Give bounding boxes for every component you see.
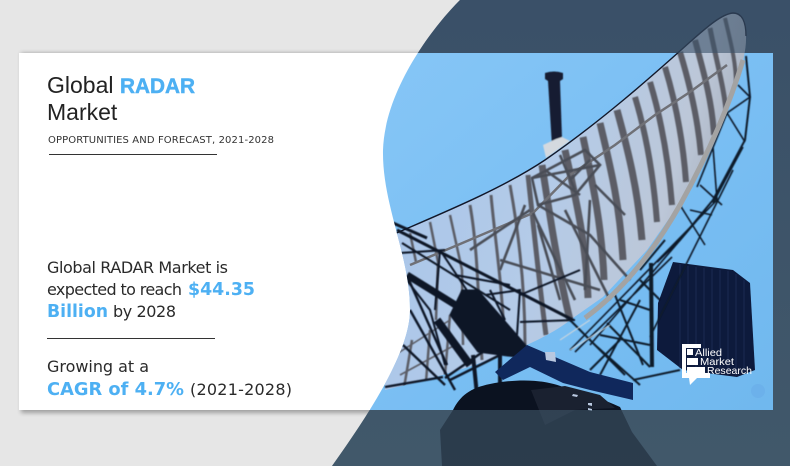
white panel (19, 53, 439, 410)
sky (370, 53, 773, 410)
logo wordmark (695, 347, 752, 377)
market value unit: Billion (47, 301, 108, 322)
growth period: (2021-2028) (190, 380, 292, 399)
growth line one: Growing at a (47, 357, 149, 376)
market year: by 2028 (113, 302, 176, 321)
radar photo (370, 13, 773, 466)
rotating base (440, 345, 657, 466)
pedestal deck (495, 345, 633, 400)
growth rate: CAGR of 4.7% (47, 379, 184, 400)
title word: Global: Global (47, 72, 113, 98)
subtitle rule (49, 154, 217, 155)
logo: Allied Market Research (682, 344, 752, 385)
panel slats (680, 264, 744, 376)
logo wordmark: Allied (695, 347, 722, 359)
market value: $44.35 (188, 279, 255, 300)
panel shadow (21, 53, 777, 413)
turntable (440, 380, 657, 466)
secondary feed panel (657, 262, 755, 377)
growth text (47, 357, 292, 400)
section rule (47, 338, 215, 339)
dish rim (585, 60, 743, 318)
back truss (570, 56, 750, 385)
market size line one: Global RADAR Market is (47, 258, 228, 277)
turntable highlight (531, 386, 614, 410)
subtitle: OPPORTUNITIES AND FORECAST, 2021-2028 (48, 135, 274, 146)
title (47, 72, 195, 125)
market size line two: expected to reach (47, 280, 182, 299)
logo wordmark: Market (700, 356, 734, 368)
faint watermark dot (751, 384, 765, 398)
dark curved backdrop (332, 0, 790, 466)
dish mesh (385, 13, 746, 390)
front truss (385, 223, 610, 405)
logo icon (682, 344, 710, 385)
dish beam (410, 65, 727, 265)
dish shadow truss (470, 150, 630, 300)
market size text (47, 258, 255, 322)
title word: Market: Market (47, 99, 118, 125)
dish (385, 13, 746, 390)
radar mast feed (543, 72, 570, 158)
dish ribs (395, 18, 736, 388)
dish edge (385, 13, 746, 238)
pedestal highlights (545, 352, 592, 411)
logo wordmark: Research (707, 365, 752, 377)
title word: RADAR: RADAR (120, 74, 195, 98)
logo bars (687, 349, 705, 373)
dark band tint (332, 0, 790, 466)
